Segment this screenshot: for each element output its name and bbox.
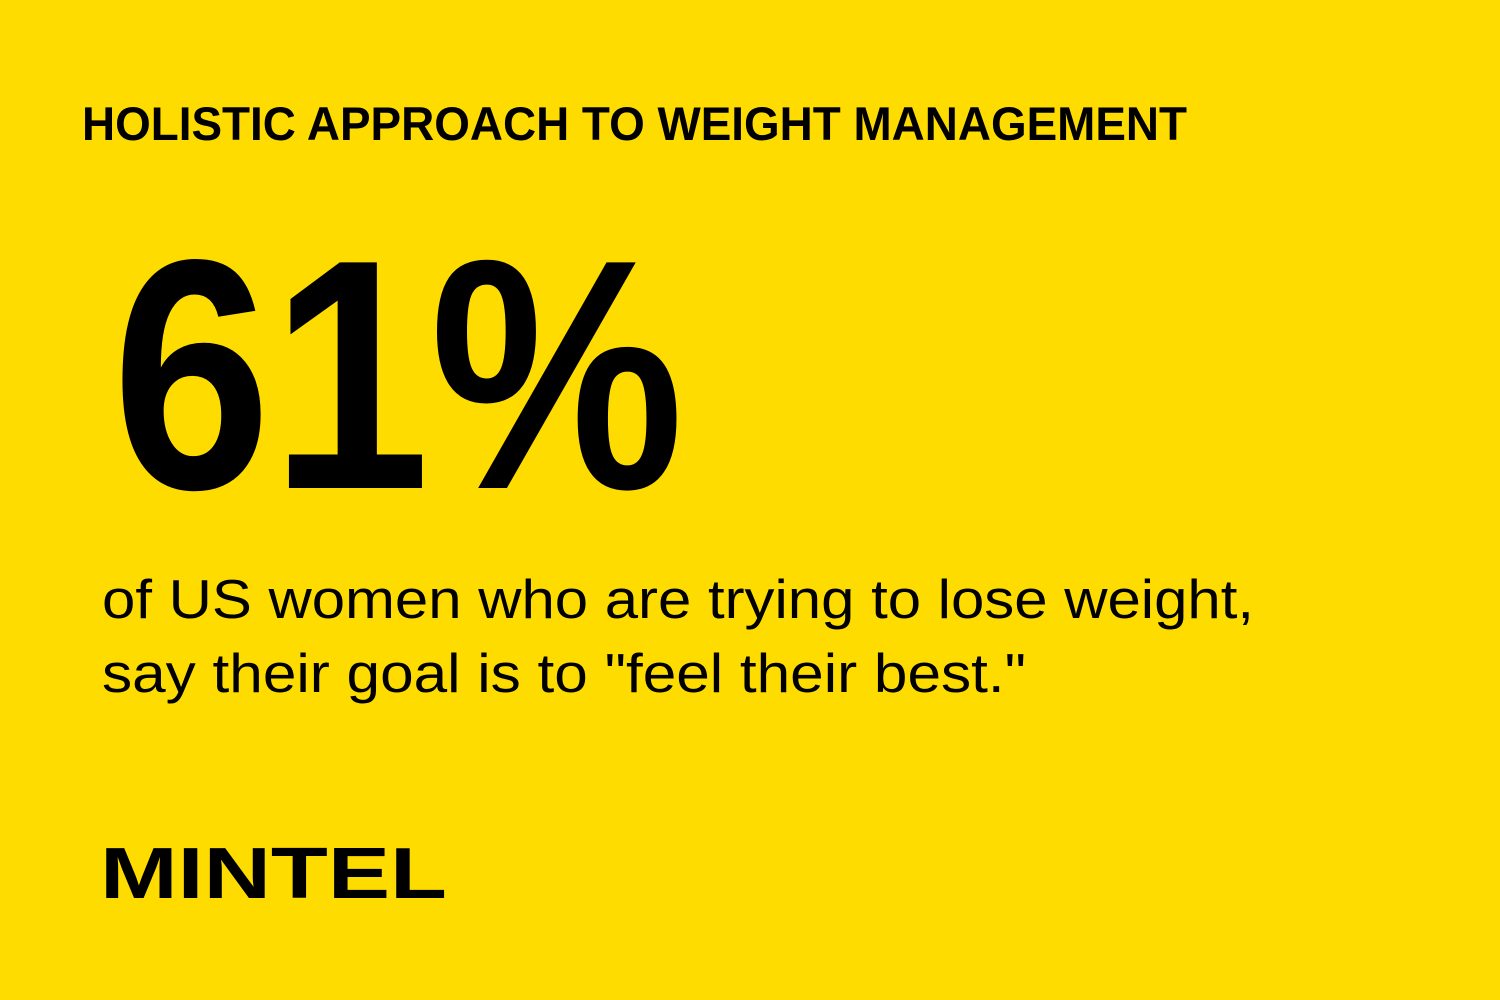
description text	[102, 568, 1254, 704]
big statistic: 61%: 61%	[112, 191, 684, 558]
description text: of US women who are trying to lose weight,	[102, 568, 1254, 630]
logo: MINTEL: MINTEL	[100, 834, 447, 914]
description text: say their goal is to "feel their best."	[102, 642, 1026, 704]
title: HOLISTIC APPROACH TO WEIGHT MANAGEMENT	[82, 97, 1187, 150]
